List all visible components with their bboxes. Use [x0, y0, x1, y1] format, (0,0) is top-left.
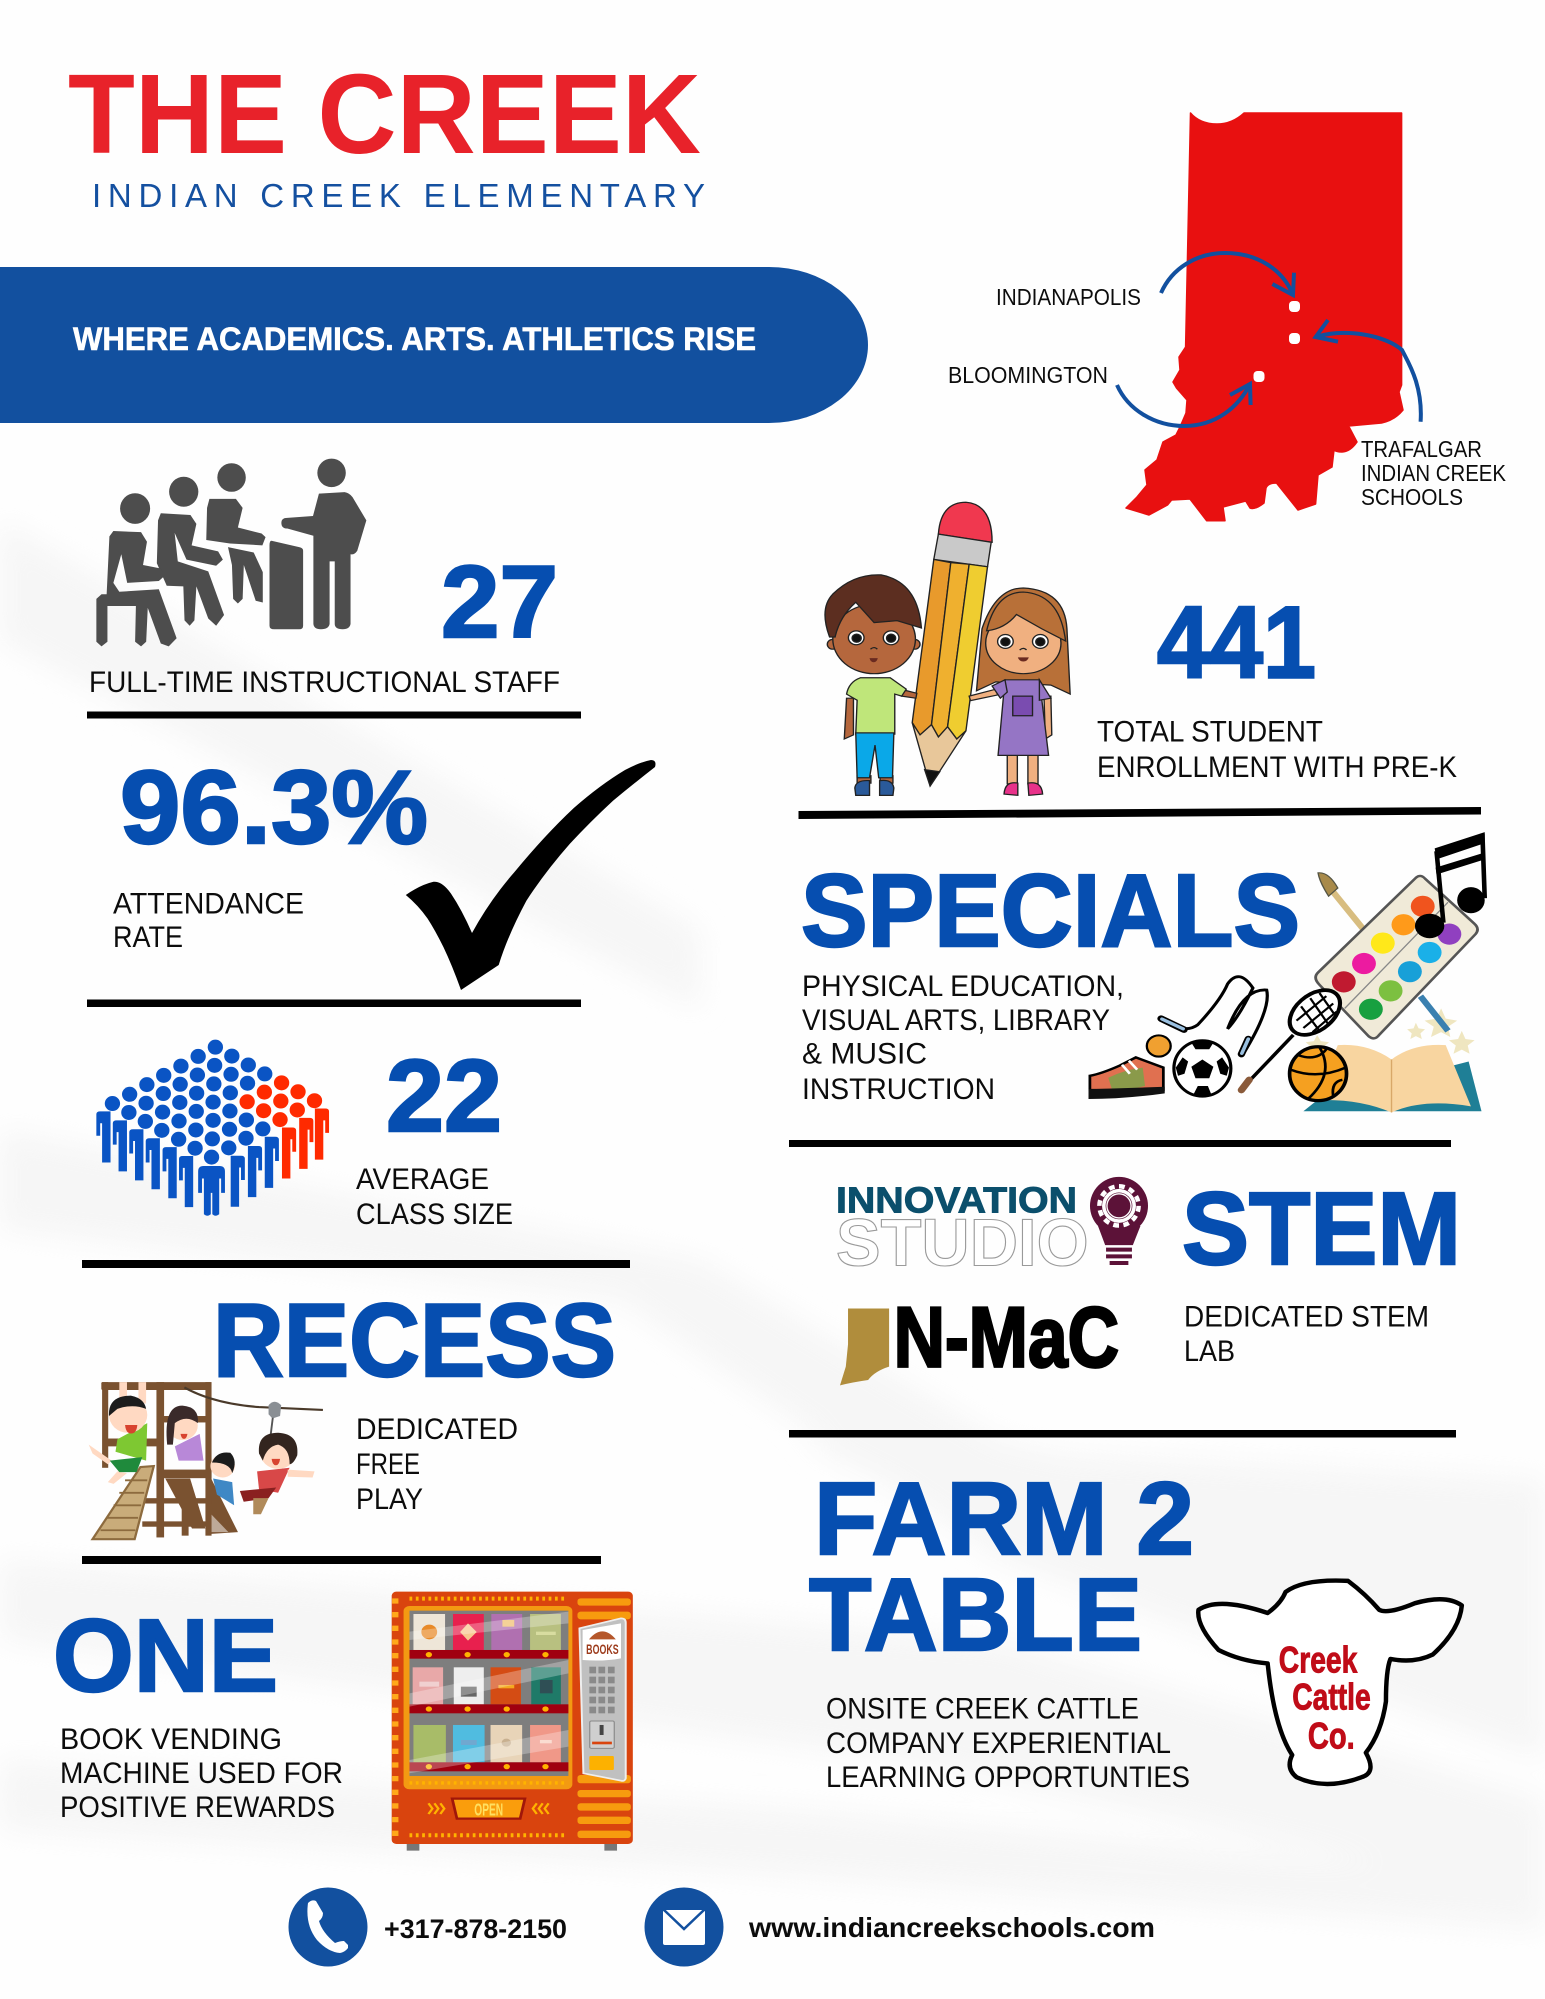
icon: vending machine: [392, 1592, 633, 1851]
label: Indianapolis: INDIANAPOLIS: [996, 284, 1141, 310]
panel: instructional staff: [89, 459, 560, 699]
pencil: [912, 502, 992, 786]
logo: creek cattle co: Cattle: [1292, 1676, 1371, 1717]
arrow: Trafalgar: [1316, 320, 1421, 422]
heading: specials: SPECIALS: [801, 853, 1300, 968]
panel: attendance: [113, 750, 656, 990]
label: book vending machine: POSITIVE REWARDS: [60, 1791, 335, 1824]
icon: seated people and teacher: [96, 459, 366, 646]
panel: Indiana map: [948, 113, 1507, 521]
icon: vending machine: OPEN: [474, 1801, 503, 1820]
label: dedicated stem lab: LAB: [1184, 1335, 1235, 1368]
label: specials description: & MUSIC: [802, 1038, 927, 1070]
text: phone number: +317-878-2150: [384, 1914, 567, 1944]
logo: innovation studio: INNOVATION: [836, 1181, 1077, 1221]
title: THE CREEK: [68, 51, 701, 177]
label: specials description: [802, 970, 1124, 1106]
label: creek cattle description: [826, 1692, 1190, 1794]
logo: creek cattle co: [1198, 1581, 1462, 1784]
panel: class size: [96, 1039, 513, 1231]
label: book vending machine: MACHINE USED FOR: [60, 1757, 343, 1790]
ramp: [93, 1466, 154, 1539]
label: dedicated stem lab: DEDICATED STEM: [1184, 1300, 1429, 1334]
arrow: Bloomington: [1117, 384, 1251, 426]
blue people: [96, 1040, 279, 1216]
panel: specials: [801, 832, 1485, 1113]
stat: 27: 27: [441, 545, 558, 659]
arrow: Indianapolis: [1161, 253, 1294, 295]
label: specials description: PHYSICAL EDUCATION,: [802, 970, 1124, 1003]
label: Trafalgar: INDIAN CREEK: [1361, 460, 1507, 486]
icon: check mark: [406, 760, 656, 990]
label: dedicated free play: DEDICATED: [356, 1413, 518, 1446]
panel: STEM: [836, 1171, 1461, 1386]
label: Trafalgar: TRAFALGAR: [1361, 436, 1482, 462]
label: Trafalgar: [1361, 436, 1507, 510]
label: dedicated free play: PLAY: [356, 1483, 423, 1516]
logo: N-MaC: [840, 1290, 1119, 1386]
heading: stem: STEM: [1182, 1171, 1461, 1286]
icon: mail: [644, 1888, 724, 1966]
label: total student enrollment: [1097, 716, 1457, 784]
heading: farm 2 table: [809, 1461, 1194, 1672]
illustration: children with pencil: [825, 502, 1070, 795]
label: creek cattle description: COMPANY EXPERIENTIAL: [826, 1727, 1171, 1760]
banner: [0, 267, 868, 423]
boy: [825, 575, 921, 795]
brush: [1333, 892, 1363, 929]
panel: recess: [89, 1283, 616, 1539]
zip line: [184, 1387, 323, 1410]
icons: arts, music, sports and book: [1089, 832, 1485, 1113]
footer contact: [288, 1888, 1155, 1966]
label: attendance rate: RATE: [113, 921, 183, 954]
icon: playground with children: [89, 1382, 323, 1539]
music note: [1415, 832, 1485, 938]
label: dedicated stem lab: [1184, 1300, 1429, 1368]
label: average class size: CLASS SIZE: [356, 1198, 513, 1231]
girl: [969, 588, 1070, 795]
palette: [1316, 876, 1478, 1038]
soccer ball: [1174, 1041, 1231, 1096]
city dots: [1254, 301, 1300, 382]
stat: 22: 22: [386, 1039, 502, 1153]
vending label: BOOKS: [586, 1642, 619, 1658]
label: full-time instructional staff: FULL-TIME INSTRUCTIONAL STAFF: [89, 666, 560, 699]
logo: creek cattle co: Creek: [1279, 1639, 1358, 1680]
label: dedicated free play: [356, 1413, 518, 1516]
icon: phone: [288, 1888, 368, 1966]
child two: [175, 1434, 204, 1461]
subtitle: INDIAN CREEK ELEMENTARY: [92, 177, 705, 214]
stat: 96.3%: 96.3%: [120, 750, 428, 866]
logo: innovation studio: [836, 1177, 1148, 1281]
panel: farm 2 table: [809, 1461, 1462, 1794]
jump rope: [1161, 977, 1267, 1053]
icon: gear bulb: [1090, 1177, 1148, 1263]
heading: recess: RECESS: [213, 1283, 616, 1399]
basketball: [1290, 1047, 1347, 1101]
stat: 441: 441: [1157, 586, 1316, 700]
label: dedicated free play: FREE: [356, 1448, 420, 1481]
label: total student enrollment: TOTAL STUDENT: [1097, 716, 1323, 748]
label: attendance rate: [113, 888, 304, 954]
text: website: www.indiancreekschools.com: [748, 1912, 1155, 1943]
label: specials description: VISUAL ARTS, LIBRARY: [802, 1004, 1110, 1037]
banner text: WHERE ACADEMICS. ARTS. ATHLETICS RISE: [73, 321, 756, 357]
logo: N-MaC: N-MaC: [894, 1290, 1119, 1386]
label: attendance rate: ATTENDANCE: [113, 888, 304, 920]
book: [1303, 1008, 1482, 1113]
panel: book vending: [53, 1592, 633, 1851]
map silhouette: [1126, 113, 1403, 521]
shoe: [1089, 1057, 1165, 1099]
child one: [89, 1382, 146, 1484]
label: Bloomington: BLOOMINGTON: [948, 362, 1108, 388]
logo: creek cattle co: Co.: [1308, 1715, 1355, 1756]
child four: [257, 1468, 290, 1493]
heading: farm 2 table: FARM 2: [814, 1461, 1194, 1576]
heading: one: ONE: [53, 1598, 278, 1713]
panel: enrollment: [825, 502, 1457, 795]
label: creek cattle description: LEARNING OPPORTUNTIES: [826, 1761, 1190, 1794]
red people: [239, 1075, 329, 1179]
heading: farm 2 table: TABLE: [809, 1557, 1142, 1672]
label: book vending machine: [60, 1723, 343, 1824]
label: average class size: AVERAGE: [356, 1163, 489, 1196]
tennis ball: [1147, 1035, 1171, 1057]
logo: innovation studio: STUDIO: [836, 1206, 1089, 1281]
icon: crowd of people: [96, 1040, 329, 1216]
label: book vending machine: BOOK VENDING: [60, 1723, 282, 1756]
label: creek cattle description: ONSITE CREEK CATTLE: [826, 1692, 1139, 1726]
label: average class size: [356, 1163, 513, 1231]
label: specials description: INSTRUCTION: [802, 1073, 995, 1106]
label: Trafalgar: SCHOOLS: [1361, 484, 1463, 510]
label: total student enrollment: ENROLLMENT WITH PRE-K: [1097, 751, 1457, 784]
racket: [1241, 982, 1350, 1090]
child three: [213, 1479, 234, 1505]
